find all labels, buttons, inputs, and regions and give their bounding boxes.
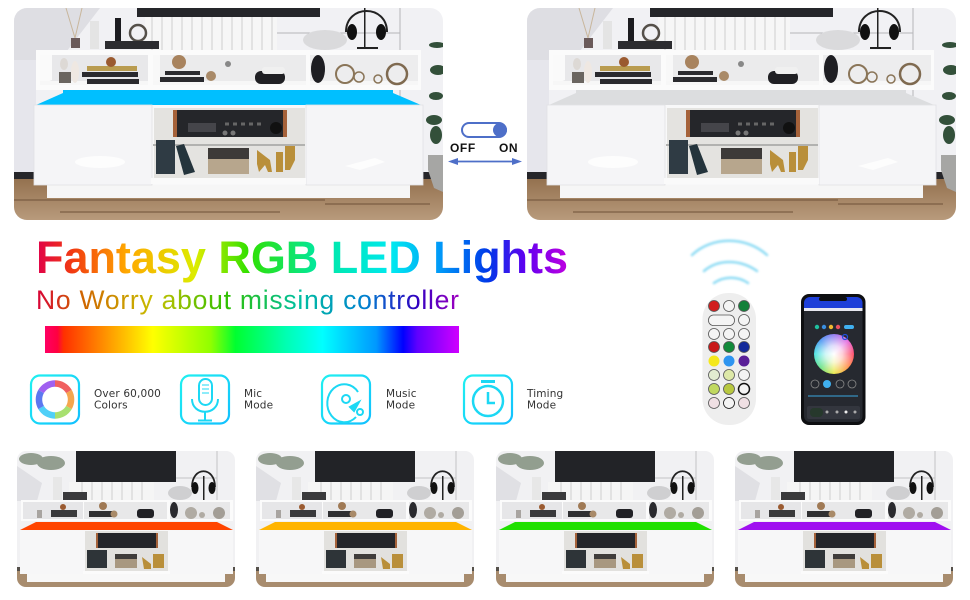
label: mic mode: Mic: [244, 388, 262, 400]
icon: timer: [464, 376, 512, 424]
icon: over 60,000 colors: [31, 376, 79, 424]
panel: purple light variant: [735, 451, 953, 587]
panel: amber light variant: [256, 451, 474, 587]
icon: microphone: [181, 376, 229, 424]
icon: wireless signal arcs: [692, 241, 767, 283]
panel: green light variant: [496, 451, 714, 587]
icon: on/off toggle with labels: OFF: [450, 141, 476, 155]
icon: music disc: [322, 376, 370, 424]
panel: TV stand with lights on: [14, 8, 446, 220]
rainbow colour bar: [45, 326, 459, 353]
label: timing mode: Timing: [526, 388, 563, 400]
label: over 60,000 colors: Over 60,000: [94, 388, 161, 400]
remote control: [702, 293, 756, 425]
title: Fantasy RGB LED Lights: [36, 232, 568, 283]
label: music mode: Mode: [386, 400, 415, 412]
label: over 60,000 colors: Colors: [94, 400, 128, 412]
icon: on/off toggle with labels: [448, 123, 522, 165]
smartphone with colour wheel app: [801, 294, 866, 425]
colour wheel: [813, 333, 855, 375]
icon: on/off toggle with labels: ON: [499, 141, 518, 155]
panel: red light variant: [17, 451, 235, 587]
label: mic mode: Mode: [244, 400, 273, 412]
panel: TV stand with lights off: [527, 8, 959, 220]
label: music mode: Music: [386, 388, 417, 400]
subtitle: No Worry about missing controller: [36, 285, 459, 315]
label: timing mode: Mode: [527, 400, 556, 412]
